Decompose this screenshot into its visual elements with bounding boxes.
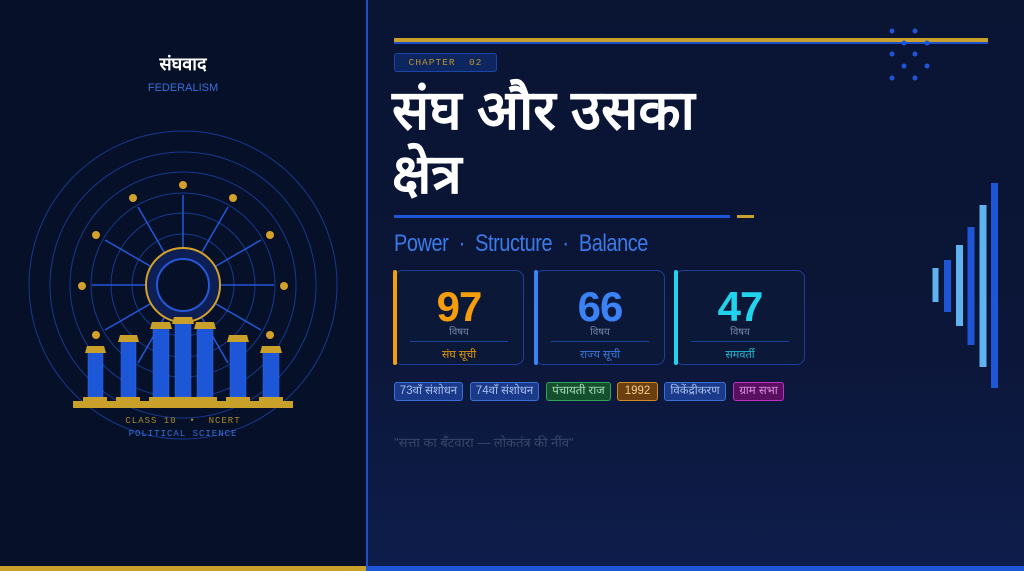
right background <box>367 0 1024 571</box>
main title: संघ और उसका <box>392 79 695 141</box>
icon: dot grid <box>890 28 930 80</box>
card: concurrent list <box>675 270 805 365</box>
card: state list: विषय <box>590 327 610 338</box>
icon: signal bars <box>932 183 998 388</box>
left subtitle: FEDERALISM <box>148 82 218 94</box>
main title: क्षेत्र <box>392 143 462 205</box>
card: union list: 97 <box>437 283 481 330</box>
left caption: CLASS 10 • NCERT <box>125 416 241 426</box>
tags: 74वाँ संशोधन <box>476 385 533 397</box>
tags: 73वाँ संशोधन <box>400 385 457 397</box>
tags: ग्राम सभा <box>739 385 778 397</box>
chapter badge: CHAPTER 02 <box>409 57 482 68</box>
quote: "सत्ता का बँटवारा — लोकतंत्र की नींव" <box>394 435 574 450</box>
left caption: POLITICAL SCIENCE <box>129 429 237 439</box>
tags <box>394 382 784 401</box>
main title <box>391 78 696 205</box>
tags: 1992 <box>625 385 650 397</box>
top rules <box>394 38 988 42</box>
title underline <box>394 215 730 218</box>
chapter badge <box>394 53 497 72</box>
left caption <box>125 416 241 439</box>
tags: पंचायती राज <box>552 385 605 397</box>
left panel <box>0 0 366 571</box>
card: state list <box>535 270 665 365</box>
card: union list <box>394 270 524 365</box>
card: concurrent list: समवर्ती <box>725 349 755 361</box>
card: union list: विषय <box>449 327 469 338</box>
card: state list: 66 <box>578 283 622 330</box>
card: union list: संघ सूची <box>442 349 476 361</box>
subtitle: Power · Structure · Balance <box>394 230 648 257</box>
left title: संघवाद <box>159 54 207 74</box>
card: concurrent list: विषय <box>730 327 750 338</box>
card: concurrent list: 47 <box>718 283 762 330</box>
card: state list: राज्य सूची <box>580 349 620 361</box>
illustration: federal wheel with pillars <box>28 130 338 440</box>
tags: विकेंद्रीकरण <box>670 385 720 397</box>
